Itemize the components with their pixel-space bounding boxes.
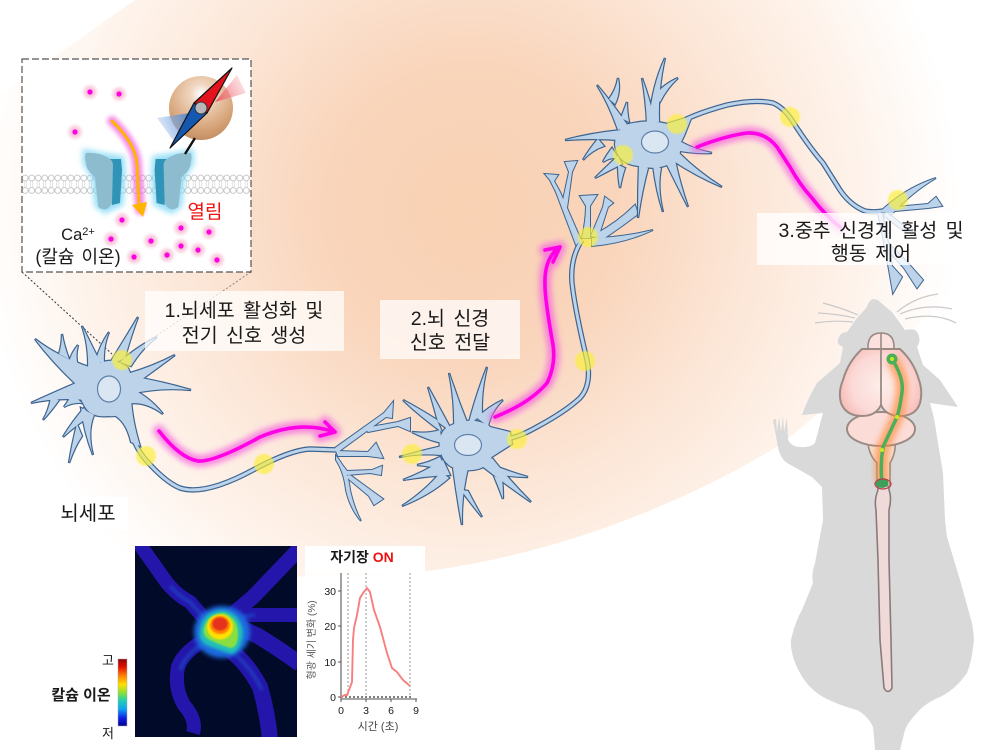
label box 2: 2.뇌 신경 xyxy=(411,308,489,330)
spinal green blob xyxy=(876,478,888,488)
calcium ions xyxy=(66,83,226,269)
signal arrow 1 xyxy=(159,422,335,461)
soma hot spot xyxy=(194,606,250,658)
spinal cord xyxy=(875,463,892,692)
fill layer 3 xyxy=(565,58,942,293)
motor pathway glow xyxy=(881,359,902,483)
x tick labels xyxy=(338,705,419,717)
label box 3 xyxy=(757,213,977,265)
axes xyxy=(341,573,417,699)
y tick labels: 30 xyxy=(324,586,336,598)
chart title: 자기장 ON xyxy=(330,549,394,565)
nucleus 3 xyxy=(642,131,668,153)
compass needle xyxy=(170,68,232,154)
y tick labels xyxy=(324,586,336,704)
chart title xyxy=(305,546,425,572)
signal arrow 2 xyxy=(495,247,560,417)
lipid membrane xyxy=(23,174,250,195)
label box 2: 신호 전달 xyxy=(410,332,490,354)
brain stem xyxy=(868,443,895,486)
yellow markers xyxy=(880,357,899,452)
x tick labels: 6 xyxy=(388,705,394,717)
y tick labels: 20 xyxy=(324,621,336,633)
calcium ion label: Ca xyxy=(61,226,82,244)
colour scale bar xyxy=(118,659,127,726)
y tick labels: 0 xyxy=(330,692,336,704)
x tick labels: 9 xyxy=(413,705,419,717)
y axis title: 형광 세기 변화 (%) xyxy=(306,600,318,680)
fluorescence curve xyxy=(341,588,410,697)
outline layer 1 xyxy=(31,317,410,521)
mouse silhouette with brain and spinal cord xyxy=(773,294,974,750)
green motor pathway xyxy=(881,359,902,483)
y tick labels: 10 xyxy=(324,657,336,669)
neuron 2 xyxy=(399,161,653,525)
label box 2 xyxy=(380,300,520,359)
red ring xyxy=(875,479,891,489)
x tick labels: 3 xyxy=(363,705,369,717)
cerebellum xyxy=(847,412,915,446)
signal arrow 3 xyxy=(697,133,840,227)
colour scale high label: 고 xyxy=(102,653,114,668)
label box 1 xyxy=(145,291,344,351)
background: orange radial glow xyxy=(20,0,920,576)
nucleus 1 xyxy=(98,376,120,402)
x axis title: 시간 (초) xyxy=(358,720,398,733)
channel glow xyxy=(86,153,191,210)
brain cell label xyxy=(47,497,128,530)
fill layer 1 xyxy=(31,317,410,521)
outline layer 3 xyxy=(565,58,942,293)
yellow activation spots xyxy=(112,107,908,474)
inset frame xyxy=(22,59,251,272)
left ion channel xyxy=(85,153,122,209)
colour scale low label: 저 xyxy=(102,726,114,741)
green node in cortex xyxy=(886,354,898,364)
calcium imaging heatmap xyxy=(135,542,300,740)
inset panel: ion channel opening xyxy=(22,59,251,272)
calcium ion label line 2: (칼슘 이온) xyxy=(35,247,121,267)
neuron branches in heatmap xyxy=(138,542,300,740)
right ion channel xyxy=(155,153,192,209)
olfactory bulbs xyxy=(868,333,894,352)
magnetic field fans xyxy=(157,75,246,140)
label box 1: 전기 신호 생성 xyxy=(182,325,306,347)
calcium ion label: 2+ xyxy=(82,226,95,238)
label box 1: 1.뇌세포 활성화 및 xyxy=(165,300,323,322)
brain cell label: 뇌세포 xyxy=(60,502,116,525)
neuron 3 xyxy=(565,58,942,293)
label box 3: 3.중추 신경계 활성 및 xyxy=(778,220,964,242)
calcium influx arrow xyxy=(112,121,147,217)
nucleus 2 xyxy=(454,434,482,456)
outline layer 2 xyxy=(399,161,653,525)
cyan signal along branches xyxy=(170,586,262,690)
dotted zoom lines from inset to neuron xyxy=(22,272,251,354)
mouse body silhouette xyxy=(773,299,974,750)
cerebral hemispheres xyxy=(840,349,921,416)
magnetic nanoparticle sphere xyxy=(169,76,233,140)
fill layer 2 xyxy=(399,161,653,525)
whiskers xyxy=(815,294,956,323)
x tick labels: 0 xyxy=(338,705,344,717)
guide lines xyxy=(341,573,412,697)
neuron 1 xyxy=(31,317,410,521)
label box 3: 행동 제어 xyxy=(831,243,911,265)
calcium ion scale label: 칼슘 이온 xyxy=(51,687,111,704)
line chart: fluorescence over time xyxy=(305,546,425,742)
opening label: 열림 xyxy=(188,201,222,223)
